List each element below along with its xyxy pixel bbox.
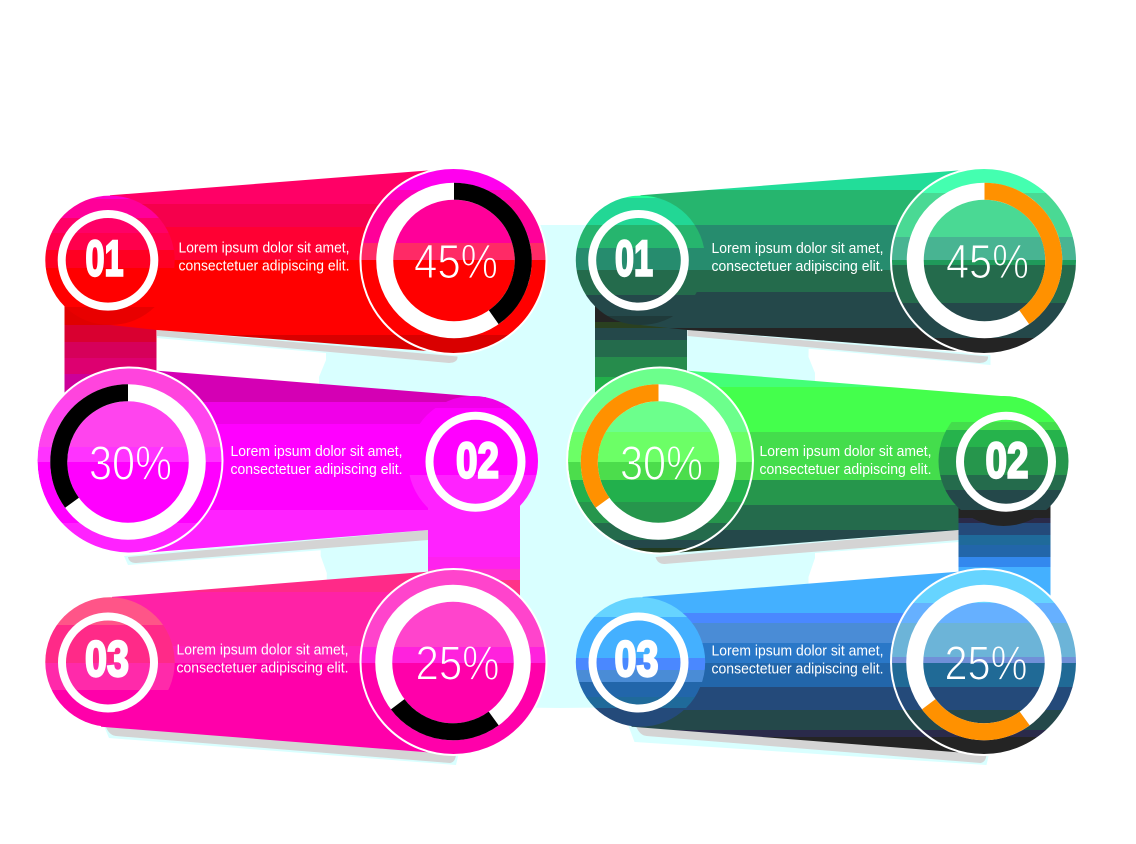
connector: row 2 to row 3 bbox=[958, 500, 1050, 610]
number badge 01: 01 bbox=[615, 230, 653, 286]
ribbon body bbox=[130, 368, 486, 554]
donut gauge 30% bbox=[567, 368, 753, 554]
band: row 3 bbox=[576, 569, 1077, 755]
panel: right green-blue column bbox=[567, 168, 1077, 765]
description text: consectetuer adipiscing elit. bbox=[760, 462, 932, 478]
donut gauge 30% bbox=[36, 368, 222, 554]
ribbon body bbox=[110, 168, 453, 353]
band: row 1 bbox=[576, 168, 1077, 354]
ribbon body bbox=[660, 368, 1016, 554]
description text: Lorem ipsum dolor sit amet, bbox=[712, 644, 884, 660]
description text: Lorem ipsum dolor sit amet, bbox=[230, 444, 402, 460]
number badge 01 bbox=[576, 196, 705, 325]
ribbon body bbox=[632, 570, 984, 755]
number badge 03: 03 bbox=[85, 631, 129, 687]
shadow: row 1 bbox=[688, 328, 990, 365]
band: row 2 bbox=[567, 368, 1068, 554]
connector: row 1 to row 2 bbox=[64, 300, 156, 410]
description text: Lorem ipsum dolor sit amet, bbox=[760, 444, 932, 460]
band: row 3 bbox=[45, 569, 547, 755]
number badge 02 bbox=[408, 396, 538, 526]
description text: consectetuer adipiscing elit. bbox=[712, 259, 884, 275]
number badge 03 bbox=[576, 597, 705, 727]
description text: consectetuer adipiscing elit. bbox=[178, 258, 350, 274]
ribbon body bbox=[101, 570, 453, 755]
number badge 03: 03 bbox=[614, 631, 658, 687]
band: row 2 bbox=[36, 368, 538, 554]
description text: Lorem ipsum dolor sit amet, bbox=[176, 642, 348, 658]
number badge 02 bbox=[938, 396, 1068, 526]
panel: left pink-red column bbox=[36, 168, 546, 765]
description text: Lorem ipsum dolor sit amet, bbox=[712, 241, 884, 257]
ribbon body bbox=[640, 168, 984, 353]
number badge 02: 02 bbox=[456, 432, 499, 488]
background: pale cyan panel bbox=[319, 225, 815, 708]
number badge 02: 02 bbox=[986, 432, 1028, 488]
number badge 01: 01 bbox=[86, 230, 124, 286]
number badge 01 bbox=[45, 196, 175, 325]
donut gauge 25% bbox=[360, 569, 546, 755]
shadow: row 3 bbox=[104, 726, 459, 765]
description text: Lorem ipsum dolor sit amet, bbox=[178, 240, 350, 256]
shadow: row 3 bbox=[628, 726, 990, 765]
donut gauge 45% bbox=[360, 168, 546, 354]
donut gauge 25%: 25% bbox=[944, 638, 1028, 690]
donut gauge 25% bbox=[891, 569, 1077, 755]
donut gauge 30%: 30% bbox=[620, 438, 703, 490]
donut gauge 45%: 45% bbox=[946, 236, 1029, 289]
donut gauge 45%: 45% bbox=[414, 236, 498, 289]
description text: consectetuer adipiscing elit. bbox=[712, 662, 884, 678]
donut gauge 30%: 30% bbox=[89, 438, 172, 490]
shadow: row 2 bbox=[124, 528, 428, 565]
connector: row 1 to row 2 bbox=[595, 300, 687, 410]
connector: row 2 to row 3 bbox=[428, 500, 520, 610]
donut gauge 25%: 25% bbox=[416, 638, 500, 690]
band: row 1 bbox=[45, 168, 547, 354]
donut gauge 45% bbox=[891, 168, 1077, 354]
number badge 03 bbox=[45, 597, 175, 727]
shadow: row 1 bbox=[157, 328, 460, 365]
shadow: row 2 bbox=[652, 528, 958, 565]
description text: consectetuer adipiscing elit. bbox=[230, 462, 402, 478]
description text: consectetuer adipiscing elit. bbox=[176, 660, 348, 676]
